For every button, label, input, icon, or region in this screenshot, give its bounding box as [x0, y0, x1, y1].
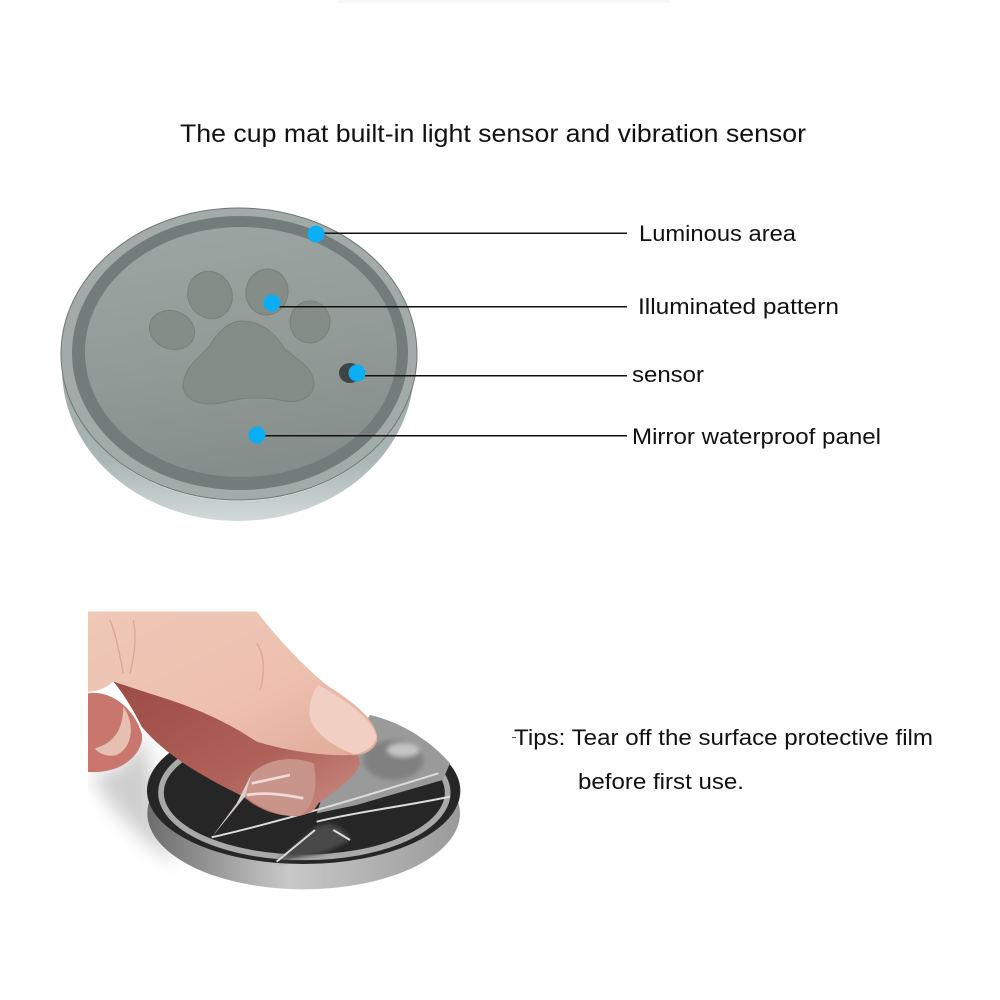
callout: Luminous area — [308, 221, 797, 246]
luminous ring — [72, 216, 408, 490]
film lifted edge — [212, 773, 252, 837]
sensor hole — [339, 363, 361, 383]
shadow — [90, 733, 180, 863]
photo: mirrored cup mat with paw pattern — [61, 208, 417, 521]
fingertip highlights — [247, 775, 303, 798]
thumbnail — [310, 685, 377, 754]
callout: Illuminated pattern — [264, 294, 839, 319]
coaster light ring — [158, 759, 450, 860]
fingertip seen through film — [245, 759, 315, 816]
tips text: before first use. — [578, 769, 744, 794]
index finger underside — [113, 680, 360, 816]
photo: hand peeling protective film — [88, 611, 460, 889]
coaster top black face — [147, 752, 460, 864]
knuckle creases — [110, 620, 263, 690]
callout: Mirror waterproof panel — [248, 424, 881, 449]
callout: Illuminated pattern: Illuminated pattern — [638, 294, 839, 319]
title: The cup mat built-in light sensor and vibration sensor — [180, 120, 806, 148]
back finger — [88, 693, 142, 772]
callout: sensor: sensor — [632, 362, 704, 387]
callout: Luminous area: Luminous area — [639, 221, 797, 246]
callout: Mirror waterproof panel: Mirror waterproof panel — [632, 424, 881, 449]
film crease highlights — [212, 773, 450, 862]
coaster side — [147, 802, 460, 890]
thumb — [88, 611, 377, 755]
faint cropped caption at top — [337, 0, 670, 3]
tips text — [512, 725, 933, 794]
coaster side edge — [62, 217, 414, 521]
fingernail of back finger — [95, 707, 131, 756]
tips text: Tips: Tear off the surface protective film — [514, 725, 933, 750]
dark grey lower film patch — [277, 824, 350, 862]
inner panel — [85, 227, 397, 477]
paw pattern — [144, 264, 330, 404]
peeled film with mottled grey surface — [317, 715, 450, 813]
bright bottom rim highlight — [63, 215, 415, 501]
coaster mirror face — [61, 208, 417, 500]
callout: sensor — [348, 362, 704, 387]
